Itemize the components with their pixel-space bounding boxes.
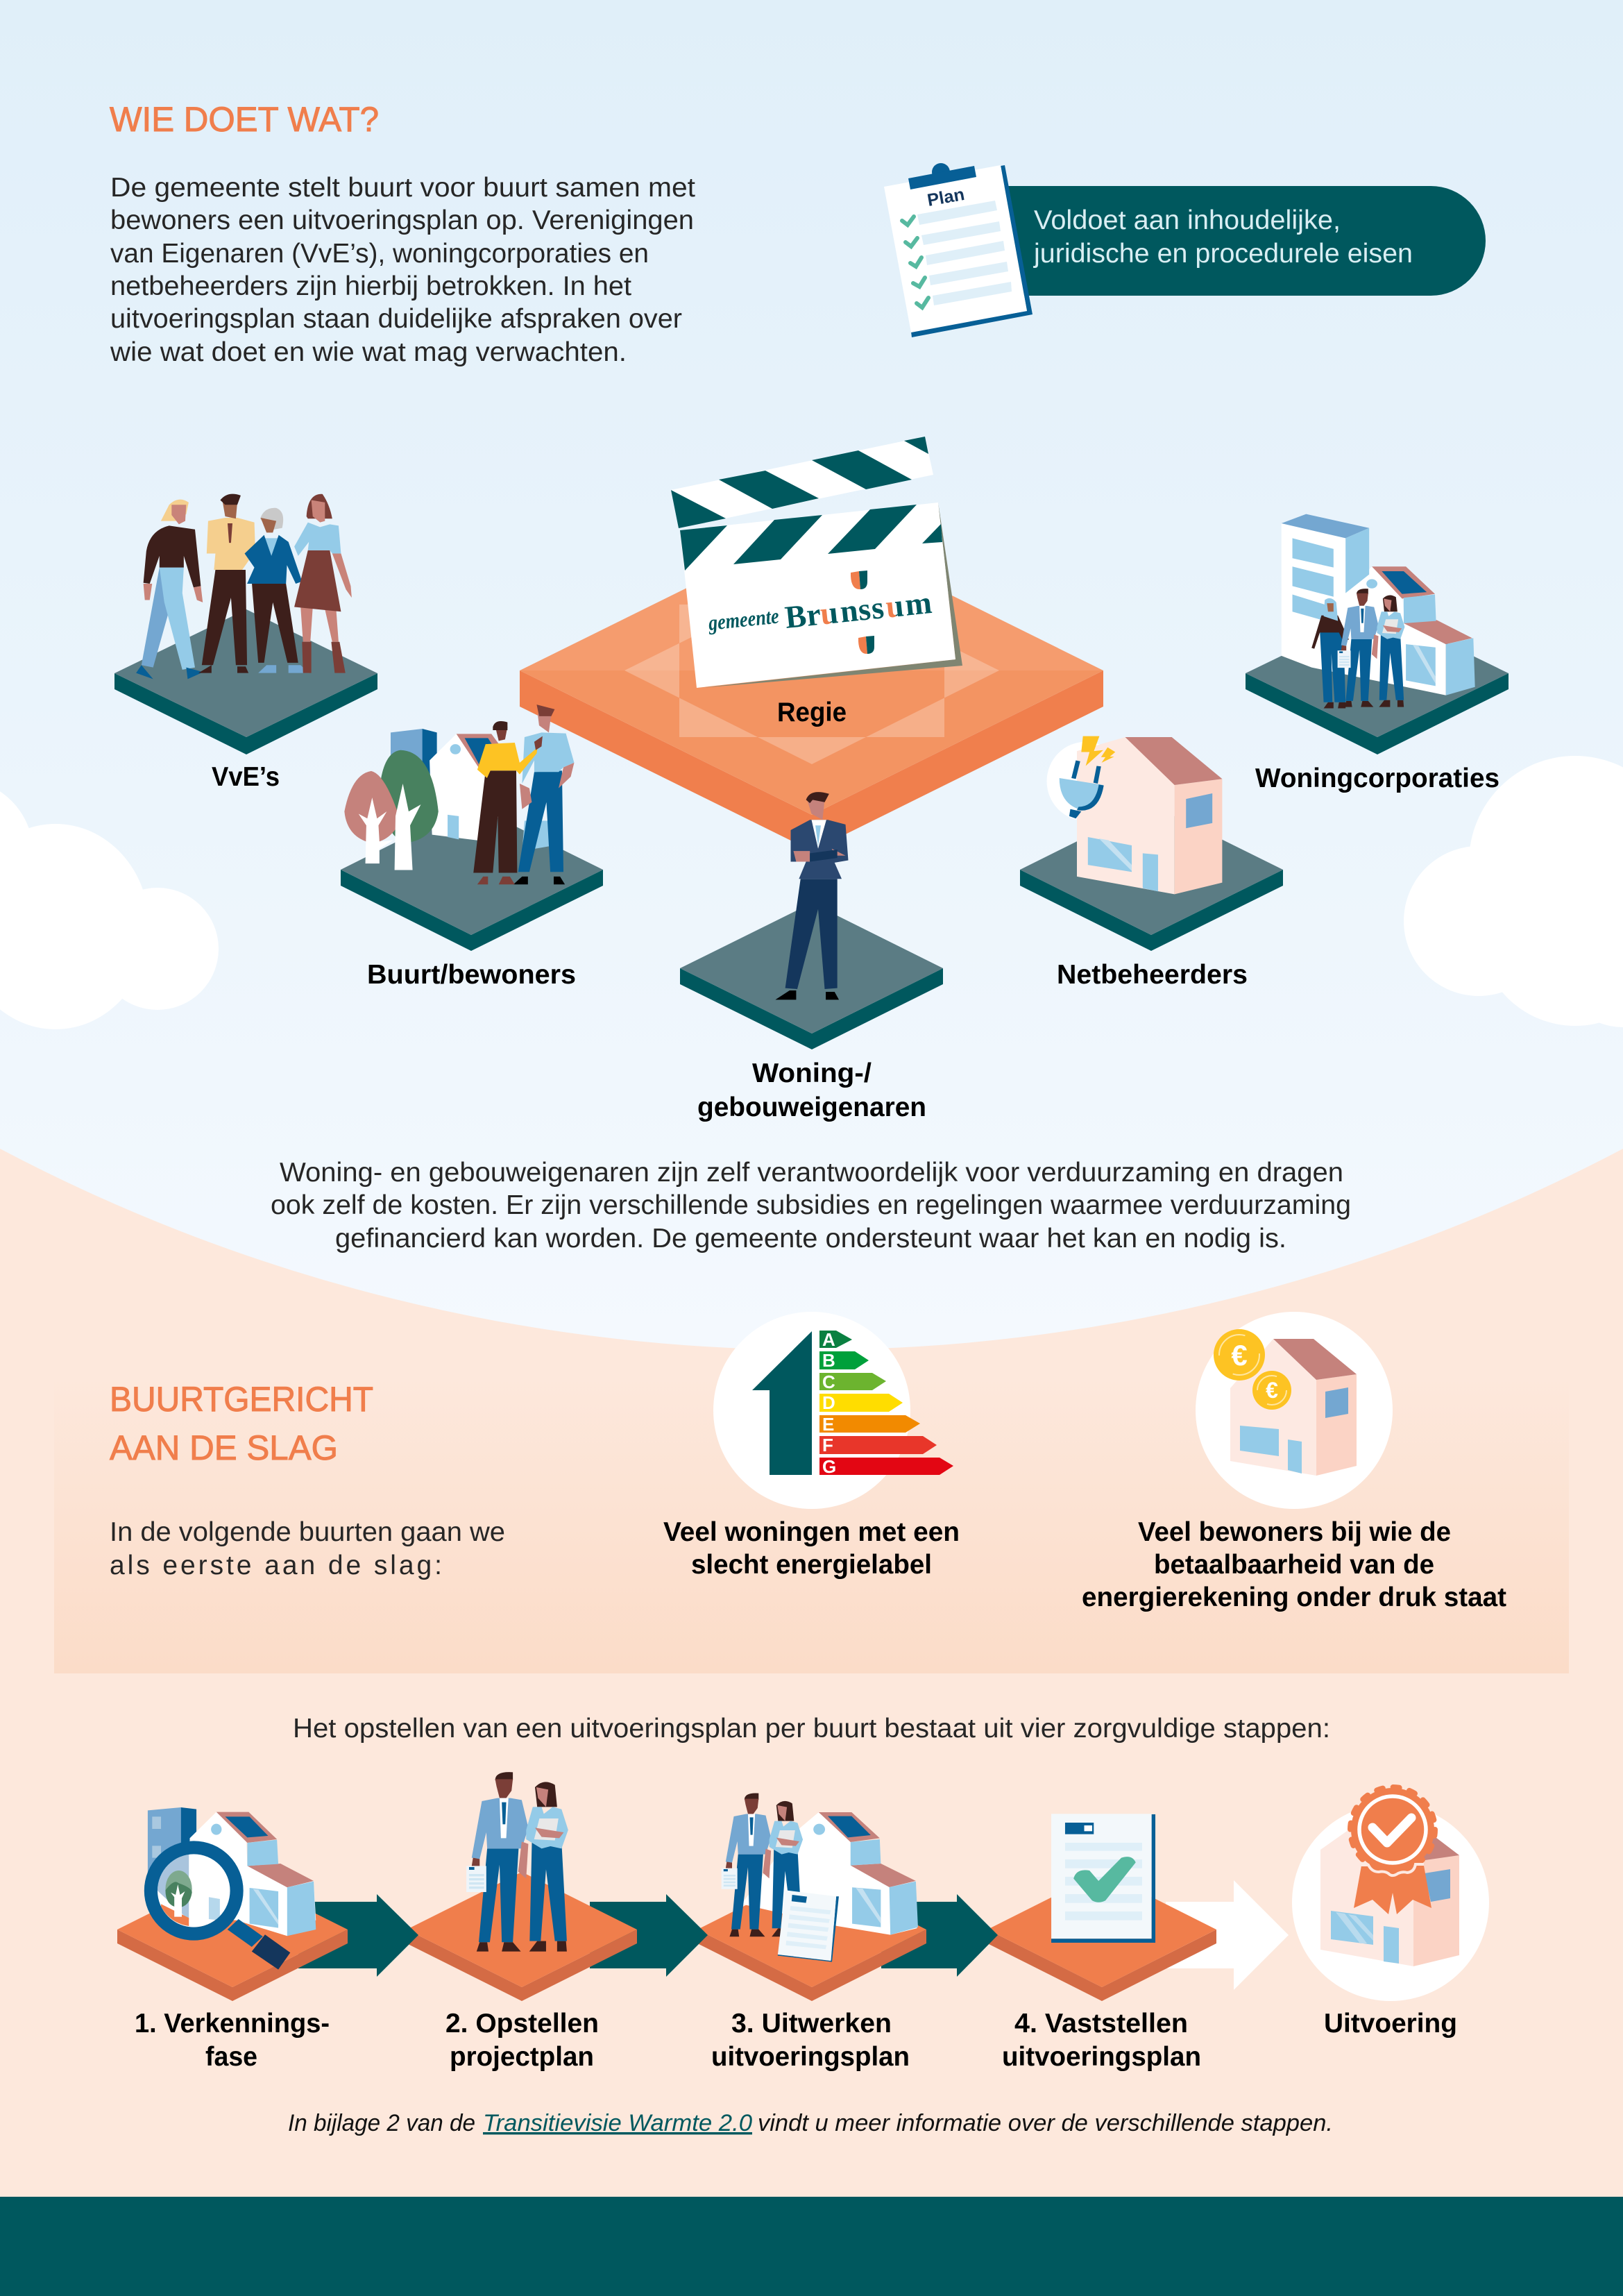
label: step 2: 2. Opstellen xyxy=(445,2009,599,2038)
heading: buurtgericht xyxy=(110,1380,373,1467)
arrow: step 3 to 4 xyxy=(881,1894,998,1977)
label: woningcorporaties: Woningcorporaties xyxy=(1255,763,1499,793)
label: step 2 xyxy=(445,2009,599,2072)
middle paragraph: gefinancierd kan worden. De gemeente ondersteunt waar het kan en nodig is. xyxy=(335,1224,1286,1253)
platform: netbeheerders xyxy=(1020,804,1283,951)
label: step 1 xyxy=(135,2009,330,2072)
buurt intro text xyxy=(110,1517,505,1580)
footnote: Transitievisie Warmte 2.0 xyxy=(483,2110,752,2136)
icon: house with coins: € xyxy=(1231,1339,1248,1371)
callout pill: juridische en procedurele eisen xyxy=(1033,239,1413,269)
label: step 3 xyxy=(711,2009,910,2072)
platform: regie xyxy=(520,526,1103,851)
label: energy label: Veel woningen met een xyxy=(663,1517,960,1547)
arrow: step 2 to 3 xyxy=(590,1894,708,1977)
label: woning: gebouweigenaren xyxy=(697,1092,926,1122)
label: step 4: 4. Vaststellen xyxy=(1014,2009,1188,2038)
label: buurt: Buurt/bewoners xyxy=(367,960,576,990)
buurt intro text: In de volgende buurten gaan we xyxy=(110,1517,505,1547)
callout pill: Voldoet aan inhoudelijke, xyxy=(1034,205,1341,235)
label: uitvoering: Uitvoering xyxy=(1324,2009,1457,2038)
footnote: In bijlage 2 van de xyxy=(288,2110,475,2136)
label: netbeheerders: Netbeheerders xyxy=(1057,960,1248,990)
heading: wie doet wat: WIE DOET WAT? xyxy=(110,100,379,139)
callout pill xyxy=(999,186,1486,296)
label: energy label: slecht energielabel xyxy=(691,1550,932,1580)
footer band xyxy=(0,2197,1623,2296)
icon: clapperboard with logo: Brunssum xyxy=(783,584,933,635)
people: vve group xyxy=(136,494,352,679)
middle paragraph: ook zelf de kosten. Er zijn verschillende subsidies en regelingen waarmee verduurzaming xyxy=(271,1190,1351,1220)
illustration: housing corporation xyxy=(1282,514,1475,709)
steps intro text: Het opstellen van een uitvoeringsplan per buurt bestaat uit vier zorgvuldige stappen: xyxy=(293,1714,1330,1744)
label: step 3: 3. Uitwerken xyxy=(731,2009,892,2038)
label: betaalbaarheid: energierekening onder druk staat xyxy=(1082,1582,1506,1612)
heading: buurtgericht: AAN DE SLAG xyxy=(110,1428,338,1467)
label: step 4 xyxy=(1002,2009,1201,2072)
icon: energy label: C xyxy=(822,1371,835,1392)
buurt intro text: als eerste aan de slag: xyxy=(110,1551,442,1580)
person: home owner xyxy=(775,792,848,999)
label: woning xyxy=(697,1058,926,1122)
label: betaalbaarheid: betaalbaarheid van de xyxy=(1154,1550,1434,1580)
label: step 1: 1. Verkennings- xyxy=(135,2009,330,2038)
intro text block: uitvoeringsplan staan duidelijke afspraken over xyxy=(110,304,682,334)
platform: woning xyxy=(680,903,943,1049)
final step circle xyxy=(1292,1804,1489,2001)
intro text block: wie wat doet en wie wat mag verwachten. xyxy=(110,337,627,367)
icon: clapperboard with logo: gemeente xyxy=(706,603,780,635)
icon: energy label: A xyxy=(822,1329,835,1350)
icon: plan clipboard: Plan xyxy=(926,185,966,210)
step 3: uitwerken xyxy=(697,1793,926,2001)
intro text block: De gemeente stelt buurt voor buurt samen met xyxy=(110,173,695,203)
icon: energy label: B xyxy=(822,1350,835,1371)
lower section panel xyxy=(54,1374,1569,1673)
heading: buurtgericht: BUURTGERICHT xyxy=(110,1380,373,1419)
platform: woningcorporaties xyxy=(1246,609,1509,754)
footnote xyxy=(288,2110,1333,2136)
icon: house with coins: € xyxy=(1266,1378,1278,1403)
label: vve: VvE’s xyxy=(212,762,280,792)
step labels xyxy=(135,2009,1457,2072)
middle paragraph xyxy=(271,1158,1351,1253)
intro text block: netbeheerders zijn hierbij betrokken. In het xyxy=(110,271,631,301)
icon: energy label: F xyxy=(822,1435,833,1455)
icon: plan clipboard xyxy=(884,163,1033,337)
icon: clapperboard with logo xyxy=(671,437,962,688)
label: regie: Regie xyxy=(777,698,847,727)
cloud right xyxy=(1404,756,1623,1027)
cloud left xyxy=(0,779,219,1029)
platform: buurt xyxy=(341,804,603,951)
result: house with badge xyxy=(1320,1787,1459,1966)
illustration: house and plug xyxy=(1047,736,1222,894)
label: woning: Woning-/ xyxy=(752,1058,872,1088)
label: step 2: projectplan xyxy=(450,2042,594,2072)
icon: house with coins xyxy=(1196,1312,1393,1509)
sky arc background xyxy=(0,0,1623,1350)
label: step 4: uitvoeringsplan xyxy=(1002,2042,1201,2072)
step 2: opstellen xyxy=(407,1772,637,2001)
intro text block: bewoners een uitvoeringsplan op. Verenigingen xyxy=(110,205,694,235)
platform: vve xyxy=(114,609,377,754)
label: step 3: uitvoeringsplan xyxy=(711,2042,910,2072)
step 4: vaststellen xyxy=(987,1814,1216,2001)
step 1: verkenning xyxy=(117,1807,348,2001)
intro text block: van Eigenaren (VvE’s), woningcorporaties en xyxy=(110,239,649,269)
middle paragraph: Woning- en gebouweigenaren zijn zelf verantwoordelijk voor verduurzaming en dragen xyxy=(280,1158,1343,1188)
illustration: buurt and residents xyxy=(344,704,574,884)
arrow: step 4 to result xyxy=(1166,1880,1289,1990)
label: energy label xyxy=(663,1517,960,1580)
intro text block xyxy=(110,173,695,367)
arrow: step 1 to 2 xyxy=(298,1894,418,1977)
footnote: vindt u meer informatie over de verschillende stappen. xyxy=(758,2110,1333,2136)
icon: energy label: D xyxy=(822,1392,835,1413)
label: betaalbaarheid: Veel bewoners bij wie de xyxy=(1138,1517,1451,1547)
icon: energy label xyxy=(713,1312,953,1509)
label: betaalbaarheid xyxy=(1082,1517,1506,1612)
icon: energy label: G xyxy=(822,1456,836,1477)
icon: energy label: E xyxy=(822,1414,834,1435)
label: step 1: fase xyxy=(205,2042,257,2072)
